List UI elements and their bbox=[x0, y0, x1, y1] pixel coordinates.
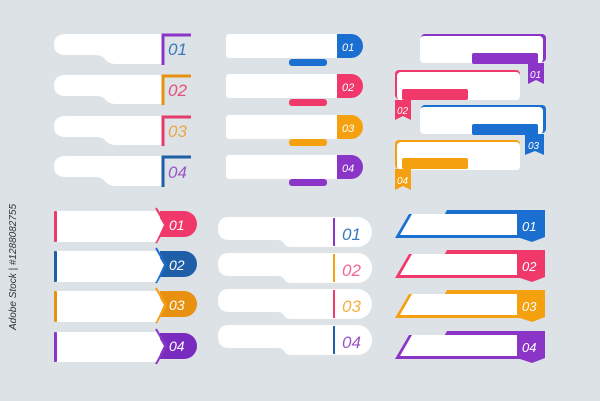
label 04 round tab bbox=[226, 155, 363, 186]
label 01 ribbon: 01 bbox=[530, 70, 541, 81]
label 04 divided: 04 bbox=[342, 333, 361, 352]
label 04 round tab: 04 bbox=[342, 163, 354, 175]
panel: line-divided labels (bottom-middle) bbox=[218, 217, 372, 355]
label 04 slanted bbox=[395, 331, 545, 363]
label 03 slanted: 03 bbox=[522, 299, 537, 314]
label 03 arrow tab bbox=[54, 288, 197, 323]
panel: round tab labels (top-middle) bbox=[226, 34, 363, 186]
label 03 bracket bbox=[54, 116, 191, 146]
label 02 divided: 02 bbox=[342, 261, 361, 280]
label 04 arrow tab bbox=[54, 329, 197, 364]
label 02 divided bbox=[218, 253, 372, 283]
label 01 round tab: 01 bbox=[342, 42, 354, 54]
label 03 round tab: 03 bbox=[342, 123, 355, 135]
label 03 divided: 03 bbox=[342, 297, 361, 316]
label 03 slanted bbox=[395, 290, 545, 322]
label 01 arrow tab bbox=[54, 208, 197, 243]
label 01 ribbon bbox=[420, 34, 546, 84]
label 02 arrow tab bbox=[54, 248, 197, 283]
label 03 bracket: 03 bbox=[168, 122, 187, 141]
label 02 ribbon bbox=[395, 70, 520, 120]
label 04 bracket: 04 bbox=[168, 163, 187, 182]
panel: bracket labels (top-left) bbox=[54, 34, 191, 187]
label 01 bracket: 01 bbox=[168, 40, 187, 59]
label 02 bracket: 02 bbox=[168, 81, 187, 100]
label 01 slanted: 01 bbox=[522, 219, 536, 234]
label 04 bracket bbox=[54, 156, 191, 187]
panel: slanted labels (bottom-right) bbox=[395, 210, 545, 363]
label 02 bracket bbox=[54, 75, 191, 105]
label 03 ribbon bbox=[420, 105, 546, 155]
panel: ribbon labels (top-right) bbox=[395, 34, 546, 190]
label 02 slanted: 02 bbox=[522, 259, 537, 274]
label 03 divided bbox=[218, 289, 372, 319]
label 04 ribbon bbox=[395, 140, 520, 190]
label 02 round tab bbox=[226, 74, 363, 106]
watermark id text: Adobe Stock | #1288082755 bbox=[8, 204, 19, 331]
label 04 slanted: 04 bbox=[522, 340, 536, 355]
label 01 bracket bbox=[54, 34, 191, 65]
label 01 arrow tab: 01 bbox=[169, 217, 185, 233]
label 01 divided bbox=[218, 217, 372, 247]
label 02 arrow tab: 02 bbox=[169, 257, 185, 273]
label 03 ribbon: 03 bbox=[528, 141, 540, 152]
label 04 arrow tab: 04 bbox=[169, 338, 185, 354]
label 01 round tab bbox=[226, 34, 363, 66]
panel: arrow tab labels (bottom-left) bbox=[54, 208, 197, 364]
label 02 round tab: 02 bbox=[342, 82, 354, 94]
label 03 round tab bbox=[226, 115, 363, 146]
label 02 slanted bbox=[395, 250, 545, 282]
label 02 ribbon: 02 bbox=[397, 106, 409, 117]
label 04 divided bbox=[218, 325, 372, 355]
label 03 arrow tab: 03 bbox=[169, 297, 185, 313]
label 01 slanted bbox=[395, 210, 545, 242]
label 04 ribbon: 04 bbox=[397, 176, 409, 187]
label 01 divided: 01 bbox=[342, 225, 361, 244]
